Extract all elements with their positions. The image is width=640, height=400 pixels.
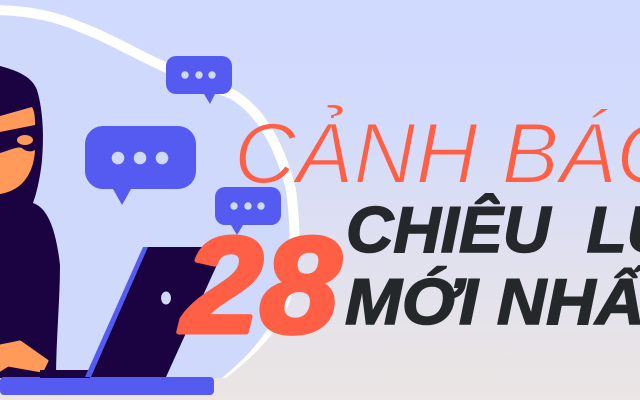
chat bubble: large — [85, 126, 196, 205]
face — [0, 107, 35, 132]
chat bubble: small lower — [215, 187, 281, 235]
chat bubble: top — [166, 56, 232, 104]
hood and body — [0, 66, 60, 378]
white blob outline — [0, 10, 294, 285]
blob shape — [0, 10, 293, 378]
laptop edge — [85, 247, 149, 377]
laptop logo — [161, 292, 171, 304]
number 28: 28 — [176, 210, 344, 362]
hacker figure — [0, 66, 60, 378]
hand — [0, 342, 47, 371]
laptop base strip — [40, 370, 90, 378]
white blob outline lower taper — [222, 280, 295, 378]
laptop — [40, 247, 225, 378]
desk — [0, 377, 214, 395]
eye slit — [17, 135, 33, 145]
laptop screen — [91, 247, 225, 377]
